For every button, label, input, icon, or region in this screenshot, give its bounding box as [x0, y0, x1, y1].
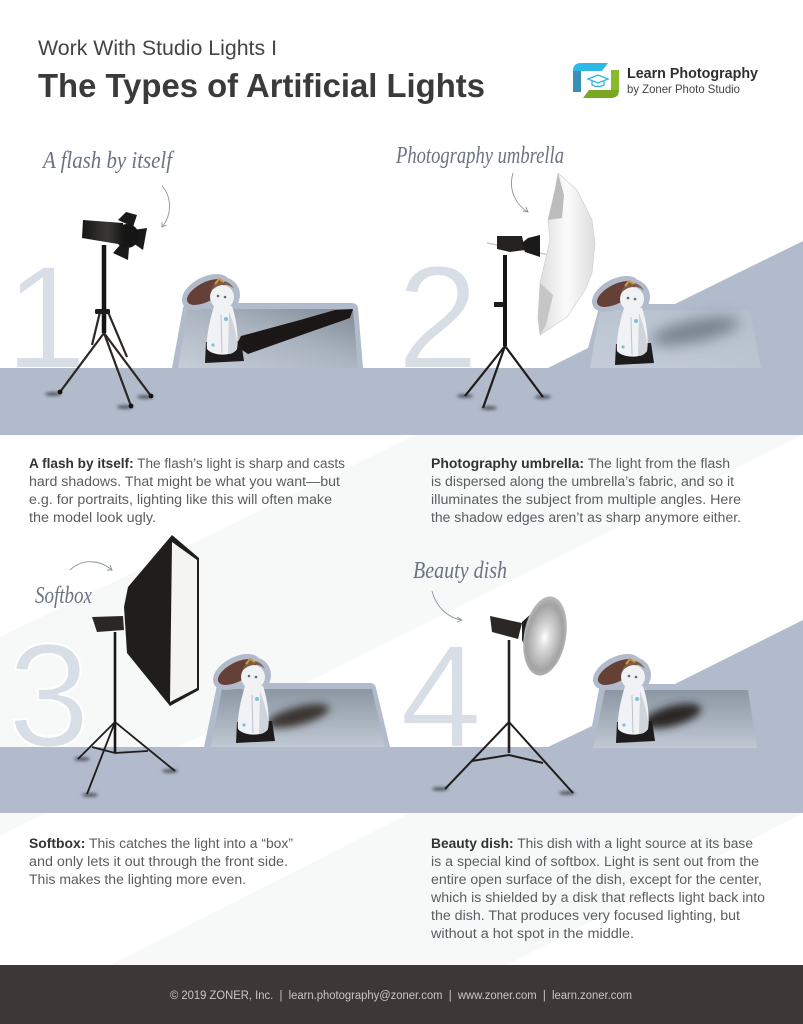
panel 4: backdrop photo [593, 690, 757, 748]
arrow: beauty dish [432, 591, 462, 622]
text block: a flash by itself: e.g. for portraits, lighting like this will often make [29, 492, 332, 507]
arrow: flash [162, 186, 170, 227]
number 1: 1 [5, 236, 87, 400]
text block: softbox [29, 836, 293, 887]
footer [0, 965, 803, 1024]
arrow: softbox [70, 562, 112, 570]
arrow: umbrella [511, 173, 528, 212]
flash 4: beauty dish [432, 593, 575, 795]
logo [573, 63, 758, 98]
footer: © 2019 ZONER, Inc. | learn.photography@zoner.com | www.zoner.com | learn.zoner.com [170, 990, 632, 1002]
text block: beauty dish: is a special kind of softbox. Light is sent out from the [431, 854, 759, 869]
panel 2: floor wedge [548, 241, 803, 368]
text block: beauty dish: the dish. That produces very focused lighting, but [431, 908, 740, 923]
logo: by Zoner Photo Studio [627, 82, 740, 96]
text block: photography umbrella: illuminates the subject from multiple angles. Here [431, 492, 741, 507]
flash 1: light on stand [45, 212, 153, 409]
text block: beauty dish: without a hot spot in the middle. [430, 926, 634, 941]
flash 2: light with umbrella [457, 173, 595, 410]
text block: beauty dish [430, 836, 765, 941]
panel 3: figurine [207, 647, 275, 743]
text block: a flash by itself: hard shadows. That might be what you want—but [29, 474, 340, 489]
text block: softbox: and only lets it out through the front side. [29, 854, 288, 869]
text block: photography umbrella: is dispersed along the umbrella’s fabric, and so it [431, 474, 734, 489]
number 4: 4 [400, 615, 482, 779]
text block: beauty dish: entire open surface of the dish, except for the center, [431, 872, 762, 887]
number 2: 2 [397, 236, 479, 400]
text block: photography umbrella: Photography umbrella: The light from the flash [431, 456, 730, 471]
background band upper [0, 435, 803, 836]
text block: a flash by itself [29, 456, 345, 525]
panel 4: figurine [587, 647, 655, 743]
background band lower [110, 813, 803, 965]
caption: photography umbrella: Photography umbrella [395, 143, 564, 169]
logo: Learn Photography [627, 66, 758, 82]
panel 3: floor [0, 747, 803, 813]
number 3: 3 [8, 614, 90, 778]
panel 3: backdrop photo [204, 683, 390, 747]
header: title: The Types of Artificial Lights [38, 67, 485, 104]
caption: softbox: Softbox [35, 583, 92, 609]
text block: photography umbrella: the shadow edges aren’t as sharp anymore either. [431, 510, 741, 525]
header: subtitle: Work With Studio Lights I [38, 37, 277, 60]
text block: softbox: This makes the lighting more even. [29, 872, 246, 887]
panel 2: figurine [586, 269, 654, 365]
panel 1: floor [0, 368, 803, 435]
panel 2: backdrop photo [590, 310, 761, 368]
panel 1: figurine [176, 267, 244, 363]
text block: softbox: Softbox: This catches the light into a “box” [29, 836, 293, 851]
flash 3: softbox [74, 535, 199, 797]
caption: a flash by itself: A flash by itself [41, 148, 175, 174]
text block: beauty dish: which is shielded by a disk that reflects light back into [430, 890, 765, 905]
panel 1: backdrop photo [172, 303, 363, 368]
text block: photography umbrella [431, 456, 741, 525]
text block: beauty dish: Beauty dish: This dish with a light source at its base [431, 836, 753, 851]
text block: a flash by itself: the model look ugly. [29, 510, 156, 525]
panel 4: floor wedge [548, 620, 803, 747]
text block: a flash by itself: A flash by itself: The flash’s light is sharp and casts [29, 456, 345, 471]
caption: beauty dish: Beauty dish [413, 558, 507, 584]
